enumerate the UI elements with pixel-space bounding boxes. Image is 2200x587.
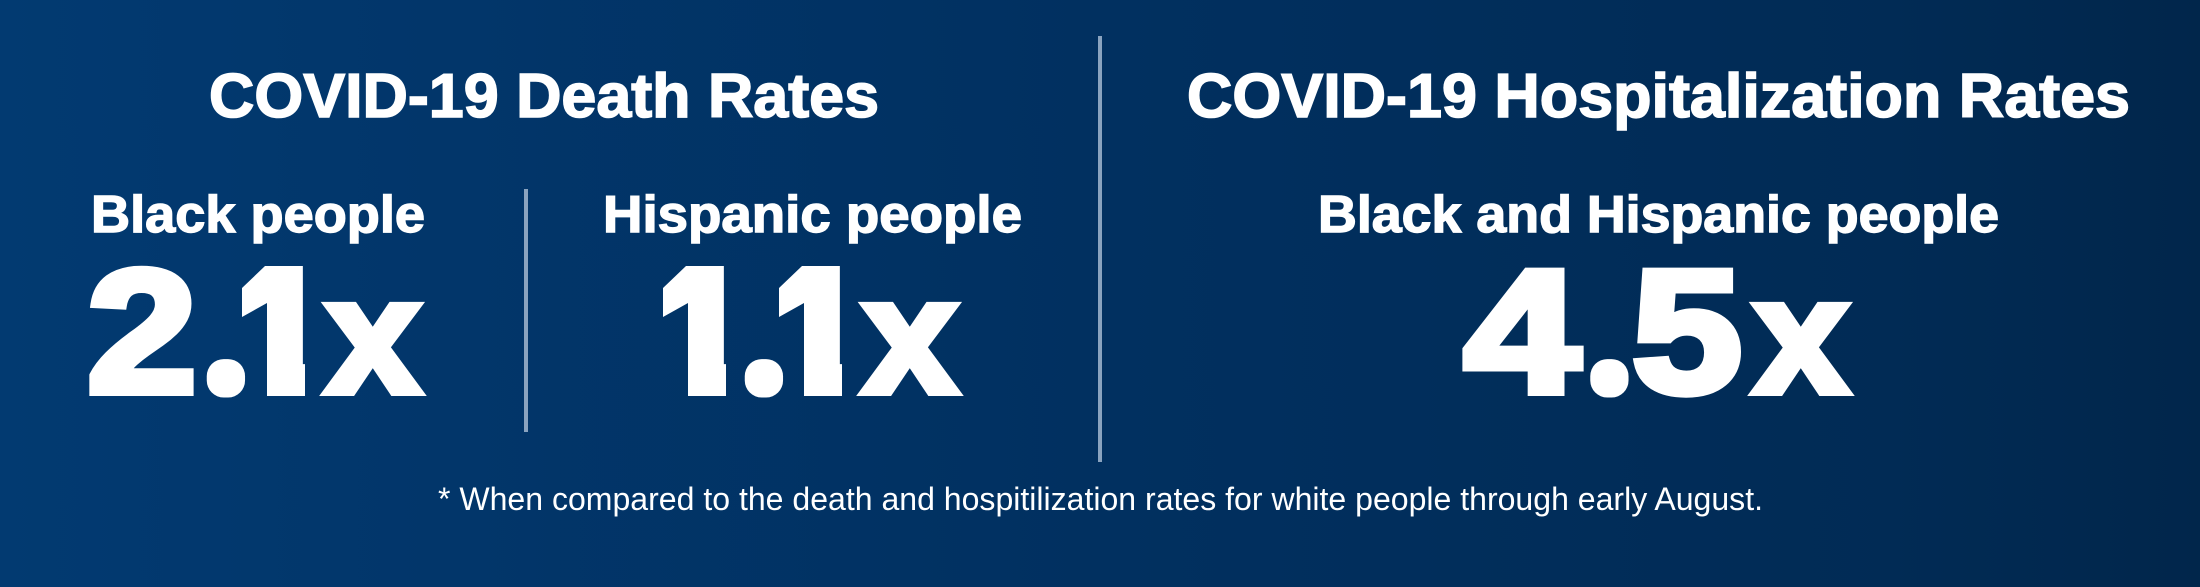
number: 2.1x: .: [222, 355, 230, 388]
label: Black people: Black people: [91, 186, 425, 244]
number: 4.5x: .: [1605, 355, 1614, 388]
number: 4.5x: 5: [1632, 235, 1742, 430]
number: 2.1x: 1: [228, 235, 325, 430]
number: 4.5x: 4: [1464, 235, 1580, 430]
number: 2.1x: x: [326, 244, 420, 427]
number: 1.1x: 1: [765, 235, 862, 430]
number: 4.5x: x: [1754, 244, 1848, 427]
label: Black and Hispanic people: Black and Hispanic people: [1318, 186, 1999, 244]
stat: Black people: [89, 194, 427, 398]
panel: hospitalization rates: [1187, 62, 2130, 430]
number: 1.1x: 1: [649, 235, 746, 430]
number: 2.1x: 2: [87, 235, 197, 430]
panel: death rates: [87, 62, 1022, 432]
stat: Hispanic people: [606, 194, 1021, 398]
number: 2.1x: [89, 266, 427, 398]
number: 4.5x: [1464, 235, 1848, 430]
footnote: * When compared to the death and hospitilization rates for white people through early August.: [438, 481, 1763, 517]
heading: death rates: COVID-19 Death Rates: [209, 62, 879, 131]
number: 1.1x: .: [760, 355, 768, 388]
heading: hospitalization rates: COVID-19 Hospitalization Rates: [1187, 62, 2130, 131]
divider: between death and hospitalization panels: [1098, 36, 1102, 462]
number: 1.1x: [663, 266, 964, 398]
divider: between death-rate stats: [524, 189, 528, 432]
number: 1.1x: x: [863, 244, 957, 427]
stat: Black and Hispanic people: [1318, 186, 1999, 430]
label: Hispanic people: Hispanic people: [603, 186, 1022, 244]
